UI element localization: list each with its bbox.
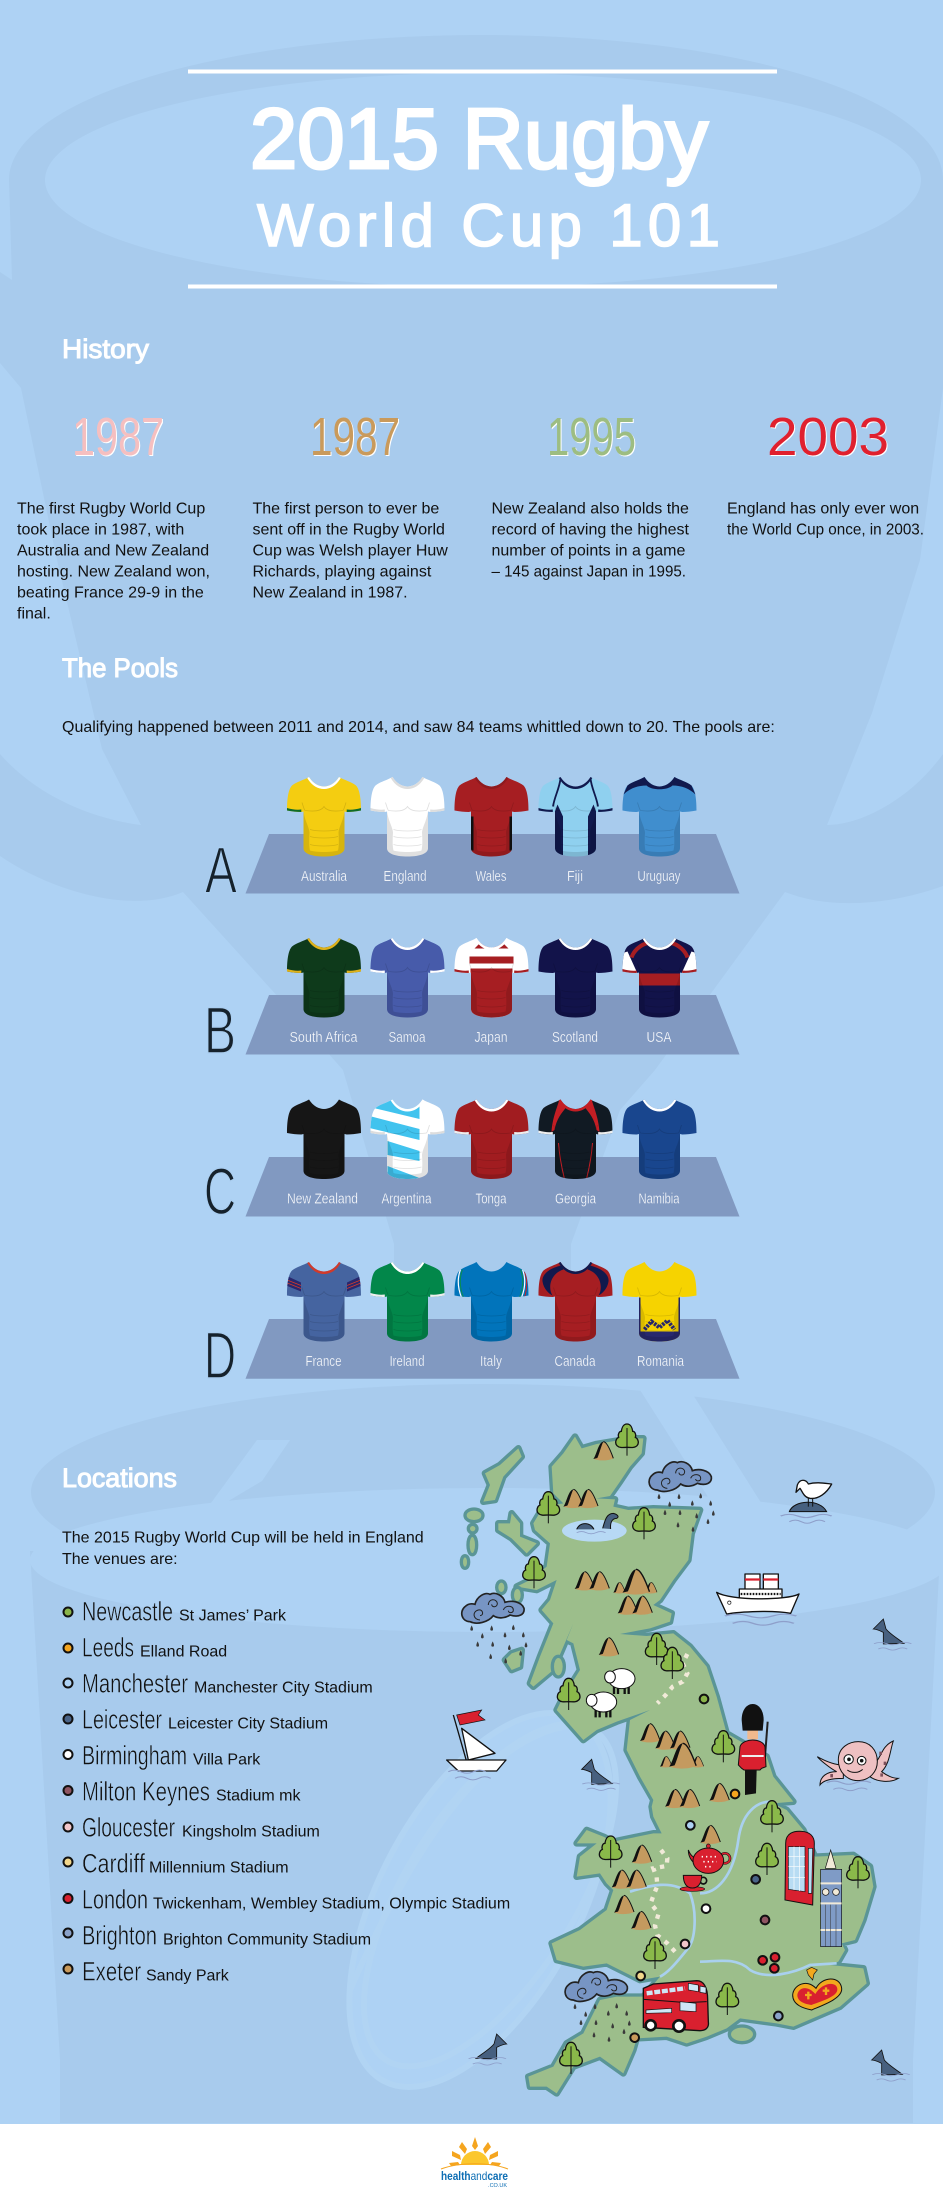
jersey: Uruguay <box>622 777 696 885</box>
venue: Manchester: Manchester City Stadium <box>194 1680 373 1696</box>
venue: Newcastle: Newcastle <box>82 1596 173 1626</box>
history column 4 <box>727 407 924 538</box>
history column 3: – 145 against Japan in 1995. <box>492 564 686 580</box>
history column 2: Cup was Welsh player Huw <box>252 542 448 560</box>
jersey: Namibia: Namibia <box>638 1190 680 1208</box>
history column 2: sent off in the Rugby World <box>252 522 445 538</box>
platform C <box>246 1157 740 1216</box>
history column 1: The first Rugby World Cup <box>17 500 205 518</box>
jersey: Uruguay: Uruguay <box>638 868 681 885</box>
venue: Manchester: Manchester <box>82 1668 188 1698</box>
sheep <box>586 1669 635 1717</box>
rivers <box>630 1802 837 1977</box>
jersey: Wales: Wales <box>476 868 506 885</box>
history column 2 <box>252 407 448 602</box>
venue: Milton Keynes: Stadium mk <box>216 1788 301 1804</box>
title: World Cup 101 <box>257 192 720 259</box>
heading: locations: Locations <box>62 1463 177 1493</box>
title: 2015 Rugby <box>250 92 708 187</box>
jersey: Australia <box>287 777 361 885</box>
venue markers <box>630 1695 783 2042</box>
logo <box>441 2137 508 2189</box>
venue: Milton Keynes: Milton Keynes <box>82 1776 210 1806</box>
venue: Birmingham: Birmingham <box>82 1740 187 1770</box>
venue: Manchester <box>64 1668 373 1698</box>
venue: Newcastle: St James’ Park <box>179 1608 287 1624</box>
jersey: Wales <box>454 777 528 885</box>
history column 2: Richards, playing against <box>252 564 432 580</box>
jersey: Scotland <box>538 938 612 1046</box>
venue: Exeter: Sandy Park <box>146 1968 230 1984</box>
venue: Exeter: Exeter <box>82 1956 141 1986</box>
venue: Gloucester: Gloucester <box>82 1812 175 1842</box>
footer <box>0 2124 943 2196</box>
rain clouds <box>462 1462 715 2042</box>
history column 1: hosting. New Zealand won, <box>17 564 210 580</box>
heading: the pools: The Pools <box>62 653 178 683</box>
jersey: Scotland: Scotland <box>552 1029 598 1046</box>
jersey: New Zealand: New Zealand <box>287 1190 358 1208</box>
jersey: USA: USA <box>646 1029 672 1046</box>
mountains <box>563 1442 729 1930</box>
history column 3: 1995 <box>547 407 636 467</box>
history column 3 <box>492 407 690 580</box>
venue: Cardiff <box>64 1848 289 1878</box>
icon: guardsman <box>738 1704 768 1795</box>
venue: Leeds <box>64 1632 227 1662</box>
icon: ship <box>717 1574 799 1625</box>
venue: Leeds: Elland Road <box>140 1644 227 1660</box>
jersey: Tonga <box>454 1100 528 1208</box>
jersey: France <box>286 1262 362 1370</box>
icon: big ben <box>821 1850 842 1947</box>
locations intro text: The venues are: <box>62 1551 178 1568</box>
history column 3: New Zealand also holds the <box>492 500 689 518</box>
jersey: Canada <box>538 1262 612 1370</box>
loch <box>562 1520 627 1542</box>
jersey: USA <box>622 938 698 1046</box>
history column 1: final. <box>17 606 51 622</box>
venue: Birmingham: Villa Park <box>193 1752 261 1768</box>
venue: London <box>64 1884 510 1914</box>
platform A <box>246 834 740 894</box>
jersey: South Africa <box>287 938 361 1046</box>
jersey: England: England <box>384 868 426 885</box>
jersey: Fiji: Fiji <box>567 868 583 885</box>
letter D: D <box>204 1318 236 1392</box>
venue: Cardiff: Cardiff <box>82 1848 145 1878</box>
history column 1: Australia and New Zealand <box>17 542 209 560</box>
history column 1 <box>17 407 210 622</box>
icon: phone box <box>785 1831 814 1905</box>
venue: Leicester: Leicester <box>82 1704 162 1734</box>
venue: Leicester <box>64 1704 328 1734</box>
pool A <box>206 777 740 894</box>
locations intro text: The 2015 Rugby World Cup will be held in England <box>62 1530 424 1546</box>
venue: Exeter <box>64 1956 230 1986</box>
jersey: Japan: Japan <box>474 1029 508 1046</box>
logo: healthandcare <box>441 2169 508 2183</box>
platform B <box>246 995 740 1054</box>
letter A: A <box>205 833 237 907</box>
pool B <box>208 938 740 1054</box>
jersey: Italy: Italy <box>480 1353 502 1370</box>
jersey: Ireland <box>370 1262 444 1370</box>
shark fins <box>469 1619 911 2081</box>
venue: London: London <box>82 1884 148 1914</box>
icon: sailboat <box>447 1710 506 1780</box>
history column 1: 1987 <box>72 407 164 467</box>
history column 4: England has only ever won <box>727 500 919 518</box>
jersey: Georgia: Georgia <box>555 1190 596 1208</box>
jersey: Romania <box>622 1262 696 1370</box>
history column 3: record of having the highest <box>492 522 690 538</box>
icon: london bus <box>643 1981 708 2032</box>
icon: teapot and cup <box>680 1844 730 1891</box>
history column 2: The first person to ever be <box>252 500 439 518</box>
history column 2: New Zealand in 1987. <box>252 584 408 602</box>
history column 1: beating France 29-9 in the <box>17 584 204 602</box>
letter B: B <box>204 993 236 1067</box>
icon: seagull on rock <box>781 1480 832 1523</box>
jersey: Georgia <box>538 1099 612 1208</box>
map of the UK <box>447 1424 911 2093</box>
history column 3: number of points in a game <box>492 542 685 560</box>
pool C <box>206 1100 740 1216</box>
history column 4: 2003 <box>767 407 889 467</box>
venue: Brighton: Brighton Community Stadium <box>163 1932 371 1948</box>
icon: octopus <box>817 1741 898 1791</box>
walking trail <box>651 1654 687 1952</box>
venue: Gloucester: Kingsholm Stadium <box>182 1824 320 1840</box>
venue: Leicester: Leicester City Stadium <box>168 1716 328 1732</box>
heading: history: History <box>62 334 150 364</box>
jersey: Japan <box>454 938 528 1046</box>
jersey: Argentina: Argentina <box>382 1190 432 1208</box>
venue: Newcastle <box>64 1596 287 1626</box>
venue: Gloucester <box>64 1812 320 1842</box>
venue: London: Twickenham, Wembley Stadium, Olympic Stadium <box>153 1896 510 1912</box>
icon: crown <box>793 1967 842 2010</box>
locations intro text <box>62 1530 424 1568</box>
jersey: South Africa: South Africa <box>290 1029 358 1046</box>
jersey: New Zealand <box>287 1100 361 1208</box>
jersey: Argentina <box>370 1097 444 1208</box>
pools intro text: Qualifying happened between 2011 and 2014, and saw 84 teams whittled down to 20. The pools are: <box>62 719 775 736</box>
venue: Brighton: Brighton <box>82 1920 157 1950</box>
jersey: Australia: Australia <box>301 868 348 885</box>
history column 4: the World Cup once, in 2003. <box>727 522 924 538</box>
jersey: Fiji <box>538 777 612 885</box>
loch ness monster <box>577 1513 618 1534</box>
jersey: France: France <box>306 1353 342 1370</box>
venue: Leeds: Leeds <box>82 1632 134 1662</box>
jersey: Samoa <box>370 938 444 1046</box>
jersey: England <box>370 777 444 885</box>
jersey: Namibia <box>622 1100 696 1208</box>
history column 1: took place in 1987, with <box>17 522 184 538</box>
jersey: Romania: Romania <box>637 1353 685 1370</box>
landmass <box>463 1437 873 2093</box>
jersey: Canada: Canada <box>554 1353 596 1370</box>
platform D <box>246 1319 740 1379</box>
venue: Brighton <box>64 1920 371 1950</box>
venue: Cardiff: Millennium Stadium <box>149 1860 289 1876</box>
venue list <box>64 1596 510 1986</box>
logo: .CO.UK <box>488 2183 507 2189</box>
history column 2: 1987 <box>310 407 400 467</box>
pool D <box>208 1262 740 1379</box>
jersey: Italy <box>454 1262 528 1370</box>
title <box>188 70 777 288</box>
jersey: Samoa: Samoa <box>388 1029 426 1046</box>
jersey: Ireland: Ireland <box>390 1353 424 1370</box>
letter C: C <box>204 1154 236 1228</box>
trees <box>523 1424 869 2074</box>
jersey: Tonga: Tonga <box>476 1190 507 1208</box>
